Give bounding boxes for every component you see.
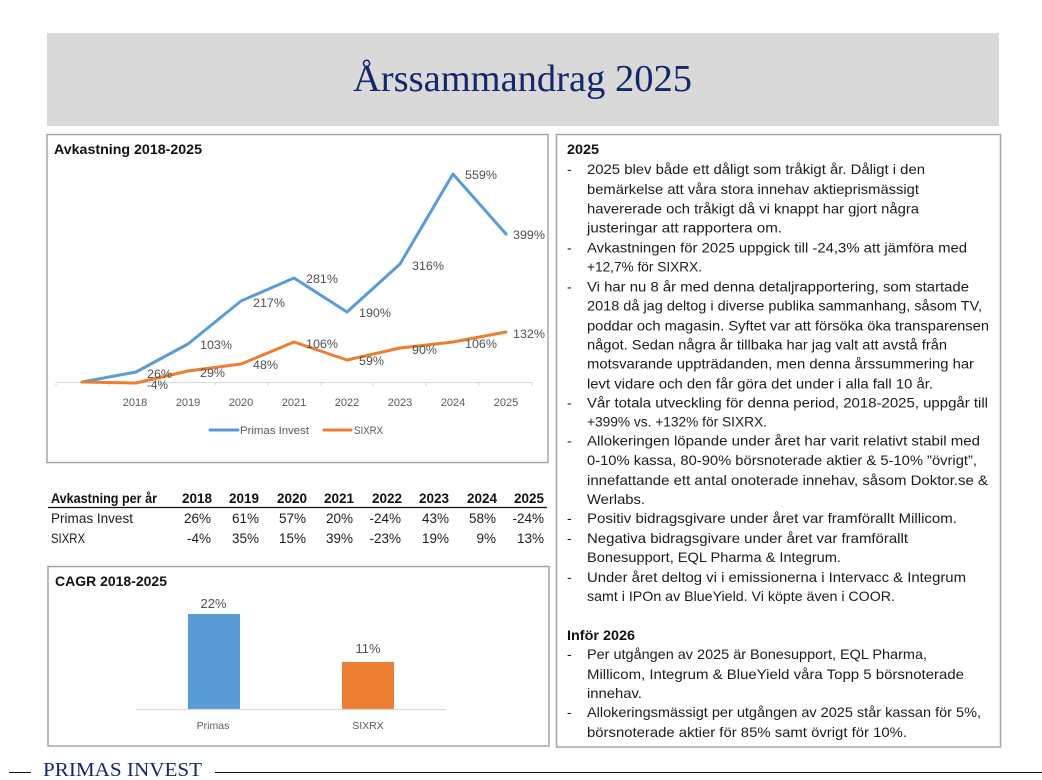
- bullet list: Inför 2026: Per utgången av 2025 är Bonesupport, EQL Pharma,: [587, 646, 927, 662]
- table row: SIXRX: 13%: [517, 531, 544, 546]
- bullet list: 2025: innefattande ett antal onoterade innehav, såsom Doktor.se &: [587, 472, 989, 488]
- x axis with year labels: 2023: [388, 397, 412, 409]
- value labels: 22%: [200, 596, 227, 611]
- value labels: [200, 596, 381, 656]
- data labels: Primas Invest: 26%: [147, 369, 172, 381]
- table row: Primas Invest: 61%: [232, 511, 259, 526]
- bullet list: Inför 2026: Allokeringsmässigt per utgången av 2025 står kassan för 5%,: [587, 704, 981, 720]
- bullet list: Inför 2026: [567, 646, 981, 740]
- legend: SIXRX: [354, 425, 384, 437]
- category labels: SIXRX: [352, 720, 384, 732]
- bullet list: 2025: bemärkelse att våra stora innehav aktieprismässigt: [587, 181, 919, 197]
- bullet list: 2025: +12,7% för SIXRX.: [587, 258, 702, 274]
- data labels: SIXRX: 106%: [465, 339, 497, 351]
- bullet list: 2025: +399% vs. +132% för SIXRX.: [587, 413, 767, 429]
- data labels: Primas Invest: 399%: [513, 230, 545, 242]
- bullet list: 2025: -: [567, 394, 572, 410]
- bullet list: 2025: justeringar att rapportera om.: [586, 220, 782, 236]
- bullet list: 2025: 2025 blev både ett dåligt som tråkigt år. Dåligt i den: [587, 161, 925, 177]
- chart heading: Avkastning 2018-2025: [54, 141, 202, 157]
- bullet list: 2025: Negativa bidragsgivare under året var framförallt: [587, 530, 908, 546]
- table row: SIXRX: [51, 531, 544, 546]
- x axis with year labels: 2021: [282, 397, 306, 409]
- bar: SIXRX: [342, 662, 394, 709]
- bullet list: 2025: -: [567, 569, 572, 585]
- line: SIXRX: [82, 332, 506, 383]
- x axis with year labels: 2024: [441, 397, 465, 409]
- table header: 2019: [229, 491, 259, 506]
- table row: Primas Invest: 57%: [279, 511, 306, 526]
- bullet list: 2025: Avkastningen för 2025 uppgick till -24,3% att jämföra med: [587, 239, 967, 255]
- table row: Primas Invest: Primas Invest: [51, 511, 133, 526]
- bullet list: 2025: något. Sedan några år tillbaka har jag valt att avstå från: [587, 336, 947, 352]
- panel: line chart of returns 2018-2025: [47, 134, 548, 462]
- panel: CAGR bar chart: [48, 566, 549, 746]
- data labels: Primas Invest: 103%: [200, 340, 232, 352]
- bullet list: 2025: Bonesupport, EQL Pharma & Integrum.: [587, 549, 841, 565]
- table header: Avkastning per år: [51, 491, 158, 506]
- data labels: Primas Invest: [147, 170, 545, 381]
- data labels: SIXRX: 90%: [412, 345, 437, 357]
- table header: 2023: [419, 491, 449, 506]
- bullet list: Inför 2026: -: [567, 704, 572, 720]
- heading: 2025: 2025: [567, 141, 599, 157]
- table header: 2022: [372, 491, 402, 506]
- x axis with year labels: 2022: [335, 397, 359, 409]
- data labels: Primas Invest: 281%: [306, 274, 338, 286]
- bullet list: 2025: 2018 då jag deltog i diverse publika sammanhang, såsom TV,: [587, 297, 982, 313]
- table: yearly returns: [48, 491, 547, 546]
- table header: 2020: [277, 491, 307, 506]
- table row: SIXRX: -4%: [187, 531, 211, 546]
- bullet list: 2025: Werlabs.: [587, 491, 645, 507]
- table row: SIXRX: 19%: [422, 531, 449, 546]
- table header: 2025: [514, 491, 544, 506]
- bullet list: 2025: -: [567, 433, 572, 449]
- data labels: Primas Invest: 190%: [359, 308, 391, 320]
- table row: Primas Invest: -24%: [512, 511, 544, 526]
- table row: SIXRX: 39%: [326, 531, 353, 546]
- data labels: SIXRX: -4%: [147, 380, 168, 392]
- bullet list: Inför 2026: Millicom, Integrum & BlueYield våra Topp 5 börsnoterade: [587, 666, 964, 682]
- bullet list: 2025: levt vidare och den får göra det under i alla fall 10 år.: [587, 375, 933, 391]
- bullet list: 2025: Allokeringen löpande under året har varit relativt stabil med: [587, 433, 980, 449]
- bullet list: Inför 2026: innehav.: [587, 685, 642, 701]
- data labels: SIXRX: 29%: [200, 368, 225, 380]
- x axis with year labels: 2025: [494, 397, 518, 409]
- bullet list: 2025: -: [567, 239, 572, 255]
- table row: Primas Invest: 58%: [469, 511, 496, 526]
- category labels: [197, 720, 384, 732]
- table row: Primas Invest: -24%: [369, 511, 401, 526]
- x axis with year labels: 2018: [123, 397, 147, 409]
- bullet list: 2025: motsvarande uppträdanden, men denna årssummering har: [587, 355, 974, 371]
- title banner: [47, 33, 999, 126]
- data labels: SIXRX: 48%: [253, 360, 278, 372]
- bullet list: 2025: -: [567, 510, 572, 526]
- panel: commentary text: [556, 134, 1000, 747]
- table row: Primas Invest: [51, 511, 544, 526]
- bullet list: 2025: Vi har nu 8 år med denna detaljrapportering, som startade: [587, 278, 969, 294]
- bullet list: 2025: 0-10% kassa, 80-90% börsnoterade aktier & 5-10% ”övrigt”,: [587, 452, 977, 468]
- bullet list: 2025: havererade och tråkigt då vi knappt har gjort några: [587, 200, 919, 216]
- x axis with year labels: 2020: [229, 397, 253, 409]
- bullet list: 2025: [567, 161, 989, 604]
- table header: 2018: [182, 491, 212, 506]
- bullet list: Inför 2026: börsnoterade aktier för 85% samt övrigt för 10%.: [587, 724, 907, 740]
- data labels: SIXRX: [147, 329, 545, 392]
- value labels: 11%: [355, 641, 381, 656]
- bullet list: 2025: poddar och magasin. Syftet var att försöka öka transparensen: [587, 317, 989, 333]
- table row: SIXRX: 9%: [476, 531, 496, 546]
- bullet list: 2025: Under året deltog vi i emissionerna i Intervacc & Integrum: [587, 569, 966, 585]
- bullet list: 2025: Vår totala utveckling för denna period, 2018-2025, uppgår till: [587, 394, 988, 410]
- table row: Primas Invest: 43%: [422, 511, 449, 526]
- table row: Primas Invest: 26%: [184, 511, 211, 526]
- bullet list: 2025: samt i IPOn av BlueYield. Vi köpte även i COOR.: [587, 588, 895, 604]
- data labels: Primas Invest: 559%: [465, 170, 497, 182]
- heading: Inför 2026: Inför 2026: [567, 627, 635, 643]
- title: Årssammandrag 2025: [353, 58, 692, 100]
- data labels: SIXRX: 106%: [306, 339, 338, 351]
- table row: SIXRX: -23%: [369, 531, 401, 546]
- bullet list: 2025: Positiv bidragsgivare under året var framförallt Millicom.: [587, 510, 957, 526]
- table row: Primas Invest: 20%: [326, 511, 353, 526]
- data labels: Primas Invest: 316%: [412, 261, 444, 273]
- x axis with year labels: 2019: [176, 397, 200, 409]
- table header: [48, 491, 547, 508]
- table row: SIXRX: SIXRX: [51, 531, 85, 546]
- table header: 2021: [324, 491, 354, 506]
- bullet list: 2025: -: [567, 161, 572, 177]
- table header: 2024: [467, 491, 497, 506]
- data labels: SIXRX: 132%: [513, 329, 545, 341]
- bullet list: Inför 2026: -: [567, 646, 572, 662]
- legend: [210, 425, 384, 437]
- chart heading: CAGR 2018-2025: [55, 573, 167, 589]
- data labels: SIXRX: 59%: [359, 356, 384, 368]
- x axis with year labels: [56, 382, 532, 409]
- data labels: Primas Invest: 217%: [253, 298, 285, 310]
- line: Primas Invest: [82, 174, 506, 382]
- table row: SIXRX: 15%: [279, 531, 306, 546]
- bullet list: 2025: -: [567, 278, 572, 294]
- bar: Primas: [188, 614, 240, 709]
- legend: Primas Invest: [240, 425, 309, 437]
- category labels: Primas: [197, 720, 229, 732]
- bullet list: 2025: -: [567, 530, 572, 546]
- table row: SIXRX: 35%: [232, 531, 259, 546]
- baseline axis: [136, 708, 446, 710]
